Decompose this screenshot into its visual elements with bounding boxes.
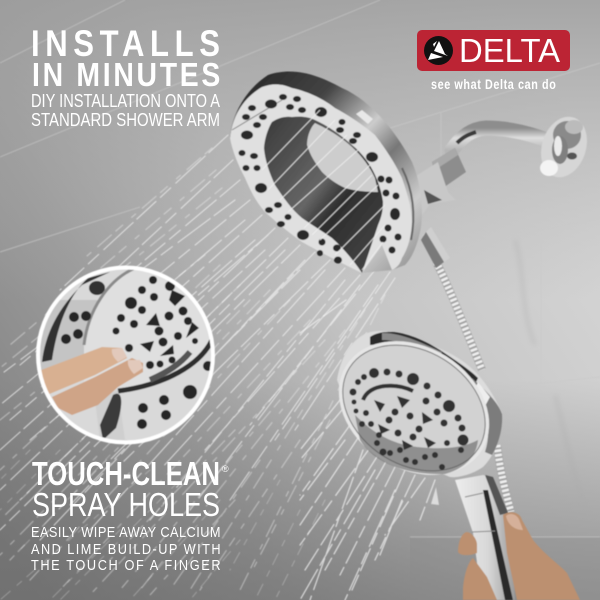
wordmark: DELTA [459,32,560,69]
logo: Delta [417,30,570,71]
outer chrome body [337,331,502,477]
hand holding handle [458,512,580,600]
left head panel [40,300,98,370]
centre opening [264,117,383,273]
main face [84,304,100,354]
handheld shower head [314,314,580,600]
handle and chrome [95,390,125,440]
far wall seen through opening [307,123,378,192]
inset circle: touch-clean close-up [36,268,213,442]
shower arm and wall flange [432,111,595,190]
hose upper [436,262,511,512]
heading: touch-clean spray holes [32,455,229,523]
text block: DIY installation: DIY INSTALLATION ONTO A [31,91,220,111]
water lines across opening [262,110,385,270]
heading: installs in minutes: INSTALLS [31,24,220,65]
heading: touch-clean spray holes: TOUCH-CLEAN [32,455,220,492]
heading: installs in minutes [31,24,220,94]
spray holes [238,94,402,264]
heading: touch-clean spray holes: ® [222,464,229,474]
water spray from handheld shower [300,300,435,600]
handle [455,475,515,600]
dark rim arc [118,340,212,391]
shower arm [452,128,555,150]
red badge [417,30,570,71]
diverter and hose connector [416,162,456,268]
spray face [314,314,514,502]
water spray from overhead shower [0,135,395,600]
text block: easily wipe away: THE TOUCH OF A FINGER [31,556,221,573]
fingers [36,347,143,415]
text block: easily wipe away [31,523,221,573]
heading: touch-clean spray holes: SPRAY HOLES [32,486,220,523]
wall flange [533,111,595,183]
heading: installs in minutes: IN MINUTES [32,56,220,94]
text block: DIY installation [31,91,220,130]
spray holes [61,276,213,429]
overhead shower head [230,72,422,273]
spray face [230,84,412,273]
swivel nut [432,148,466,190]
tagline: see what Delta can do [431,77,556,92]
curved slot [363,386,413,400]
outer rim [230,72,422,273]
spray nozzles [350,368,468,470]
text block: easily wipe away: EASILY WIPE AWAY CALCIUM [31,523,221,540]
icon: Delta triangle mark [424,36,453,65]
water droplet [431,487,439,505]
text block: easily wipe away: AND LIME BUILD-UP WITH [31,540,221,557]
text block: DIY installation: STANDARD SHOWER ARM [31,110,220,130]
